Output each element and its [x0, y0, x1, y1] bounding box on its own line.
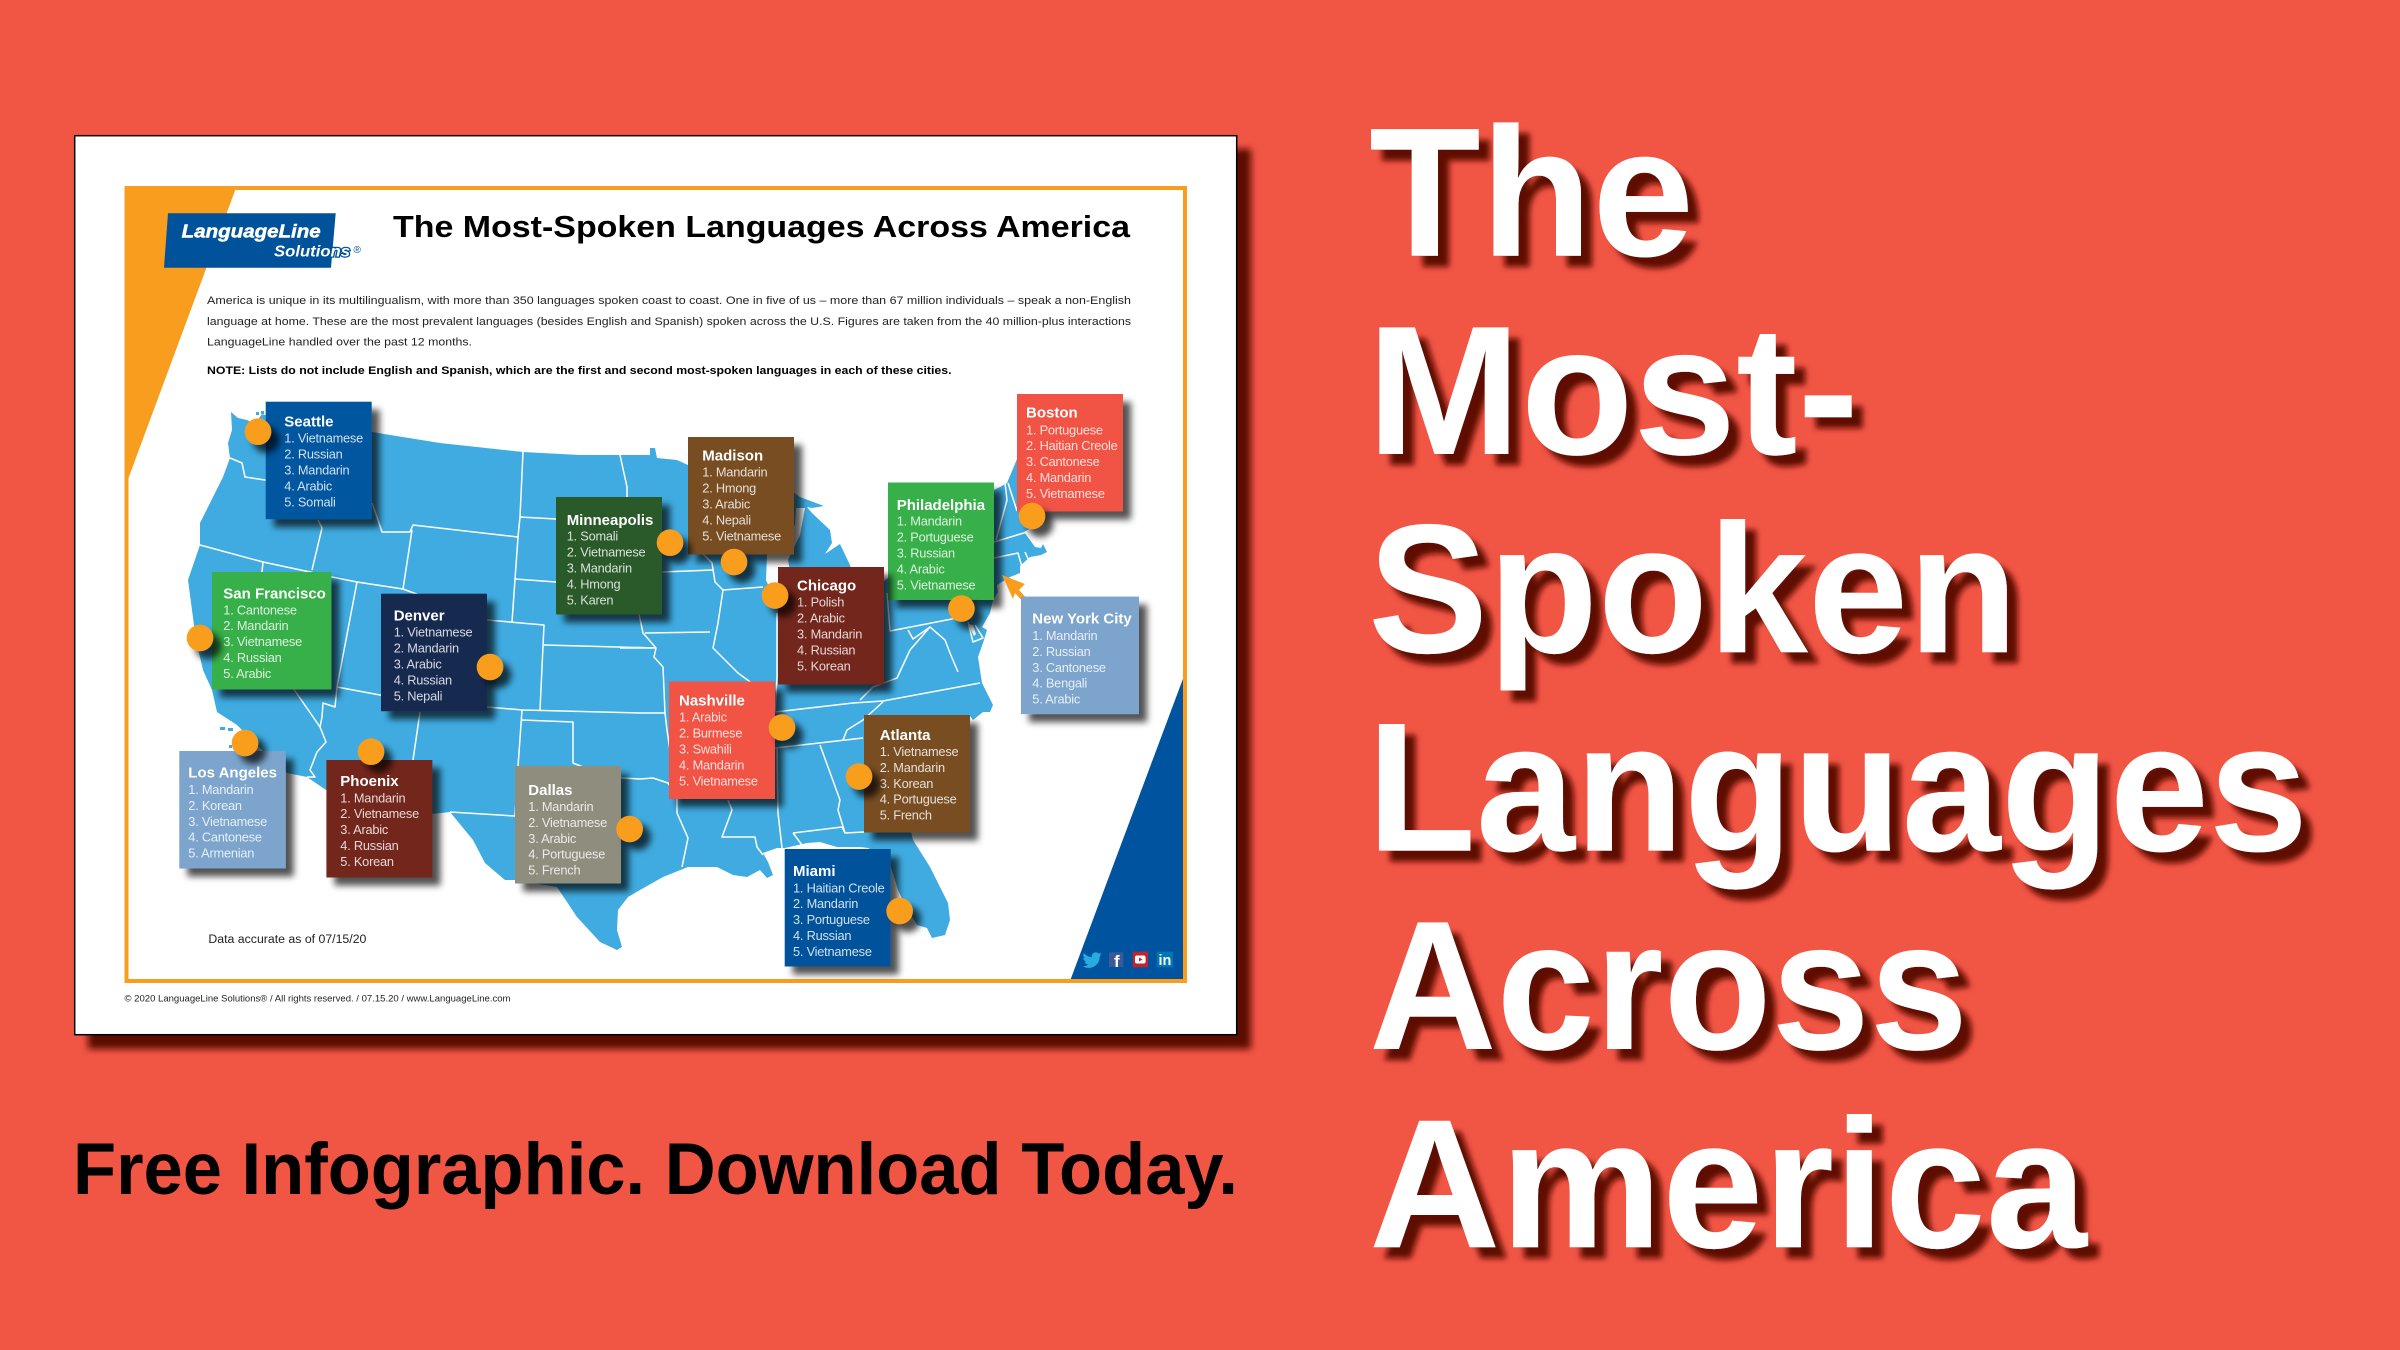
callout: San Francisco: 1. Cantonese [223, 602, 297, 617]
intro paragraph [207, 295, 1132, 348]
callout: Dallas: Dallas [528, 782, 573, 799]
map islands and water details [220, 411, 264, 748]
callout: Dallas [515, 766, 621, 884]
icon: youtube [1133, 952, 1148, 967]
callout: San Francisco: 3. Vietnamese [223, 634, 302, 649]
callout: Boston: 1. Portuguese [1026, 422, 1103, 437]
callout: Philadelphia: Philadelphia [897, 497, 986, 514]
main heading: The [1369, 89, 1694, 295]
icon: facebook: f [1114, 952, 1120, 971]
callout: Seattle: 2. Russian [284, 447, 343, 462]
main heading: Spoken [1368, 485, 2018, 691]
main heading [1367, 89, 2308, 1286]
orange corner triangle [127, 188, 236, 482]
callout: Los Angeles: 5. Armenian [188, 846, 254, 861]
callout: Philadelphia: 4. Arabic [897, 561, 945, 576]
callout: Seattle: 4. Arabic [284, 478, 333, 493]
callout: Dallas: 4. Portuguese [528, 847, 605, 862]
callout: San Francisco: 4. Russian [223, 650, 282, 665]
callout: Miami: 2. Mandarin [793, 896, 858, 911]
callout: Miami: 5. Vietnamese [793, 944, 872, 959]
logo: LanguageLine Solutions: LanguageLine [182, 221, 321, 241]
copyright footer: © 2020 LanguageLine Solutions® / All rights reserved. / 07.15.20 / www.LanguageLine.com [124, 994, 510, 1004]
callout: Dallas: 5. French [528, 863, 580, 878]
callout: Phoenix [326, 760, 432, 878]
callout: Denver: 2. Mandarin [394, 641, 459, 656]
callout: Phoenix: 5. Korean [340, 854, 394, 869]
callout: Boston: 2. Haitian Creole [1026, 438, 1118, 453]
card shadow [88, 149, 1251, 1049]
callout: New York City: 3. Cantonese [1032, 660, 1106, 675]
callout: Madison: 4. Nepali [702, 512, 751, 527]
callout: Philadelphia: 1. Mandarin [897, 514, 962, 529]
city location markers [187, 418, 1045, 924]
callout: Madison: 1. Mandarin [702, 465, 768, 480]
callout: Miami [785, 849, 891, 966]
callout: Atlanta: 2. Mandarin [880, 760, 945, 775]
callout: Boston: 4. Mandarin [1026, 470, 1091, 485]
callout: Minneapolis: 1. Somali [567, 529, 618, 544]
main heading: Most- [1367, 287, 1859, 493]
callout: Denver: 4. Russian [394, 672, 452, 687]
callout: New York City: 1. Mandarin [1032, 628, 1098, 643]
icon: linkedin: in [1158, 953, 1171, 969]
tagline: Free Infographic. Download Today. [73, 1129, 1238, 1210]
callout: San Francisco: 5. Arabic [223, 666, 272, 681]
callout: Atlanta: 5. French [880, 808, 932, 823]
callout: Seattle: 3. Mandarin [284, 462, 350, 478]
callout: Philadelphia [888, 482, 994, 600]
callout: New York City: 2. Russian [1032, 644, 1091, 659]
callout: Chicago: Chicago [797, 578, 856, 595]
callout: Nashville: 1. Arabic [679, 710, 728, 725]
card title: The Most-Spoken Languages Across America [393, 209, 1131, 244]
card sheet [75, 136, 1237, 1035]
callout: Madison: 2. Hmong [702, 481, 756, 496]
callout: Boston: 3. Cantonese [1026, 454, 1100, 469]
callout: Seattle: 5. Somali [284, 494, 336, 509]
callout: Los Angeles: 2. Korean [188, 798, 242, 813]
callout: Chicago [778, 567, 884, 684]
callout: Miami: 3. Portuguese [793, 912, 870, 927]
callout: Dallas: 1. Mandarin [528, 799, 594, 814]
callout: Dallas: 2. Vietnamese [528, 815, 607, 830]
callout: Atlanta: Atlanta [880, 727, 931, 744]
callout: Seattle: Seattle [284, 414, 334, 431]
callout: Madison: 3. Arabic [702, 496, 751, 512]
callout: New York City: 5. Arabic [1032, 692, 1081, 707]
callout: Atlanta [864, 715, 970, 832]
callout: Boston [1017, 394, 1123, 512]
callout: New York City: New York City [1032, 610, 1132, 627]
arrow: New York City pointer [1002, 575, 1032, 607]
note: NOTE: Lists do not include English and Spanish, which are the first and second most-spoken languages in each of these cities. [207, 365, 951, 377]
orange frame [126, 188, 1185, 981]
callout: Denver: 5. Nepali [394, 688, 442, 703]
callout: Boston: Boston [1026, 405, 1078, 422]
map: contiguous United States [188, 411, 1075, 950]
callout: Minneapolis: Minneapolis [567, 512, 653, 529]
callout: Miami: 1. Haitian Creole [793, 880, 885, 895]
callout: Madison: 5. Vietnamese [702, 528, 781, 543]
callout: Atlanta: 3. Korean [880, 776, 933, 791]
callout: Los Angeles: Los Angeles [188, 765, 277, 782]
callout: Denver: 3. Arabic [394, 656, 442, 672]
logo: LanguageLine Solutions: ® [354, 245, 362, 256]
logo: LanguageLine Solutions: Solutions [274, 244, 350, 261]
callout: Philadelphia: 5. Vietnamese [897, 577, 976, 592]
icon: twitter [1082, 952, 1102, 968]
social icons [1082, 952, 1173, 971]
callout: Minneapolis: 4. Hmong [567, 576, 621, 591]
callout: Atlanta: 1. Vietnamese [880, 744, 959, 759]
callout: Phoenix: 4. Russian [340, 838, 399, 853]
intro paragraph: language at home. These are the most prevalent languages (besides English and Spanish) spoken across the U.S. Figures are taken from the 40 million-plus interactions [207, 316, 1132, 328]
data accuracy note: Data accurate as of 07/15/20 [208, 934, 366, 946]
callout: Denver: 1. Vietnamese [394, 625, 473, 640]
callout: Chicago: 5. Korean [797, 658, 851, 673]
panel: infographic preview card [75, 136, 1251, 1049]
callout: Philadelphia: 3. Russian [897, 546, 955, 560]
blue corner triangle [1070, 676, 1184, 981]
callout: San Francisco: 2. Mandarin [223, 618, 289, 633]
callout: Chicago: 1. Polish [797, 595, 844, 610]
callout: Denver [381, 594, 487, 711]
callout: Chicago: 4. Russian [797, 642, 855, 657]
callout: Miami: 4. Russian [793, 928, 851, 943]
main heading: Across [1369, 882, 1968, 1088]
callout: Nashville [669, 682, 775, 799]
callout: Nashville: 4. Mandarin [679, 757, 744, 772]
callout: San Francisco: San Francisco [223, 585, 326, 602]
callout: Denver: Denver [394, 608, 445, 625]
callout: New York City: 4. Bengali [1032, 676, 1087, 691]
callout: Los Angeles: 1. Mandarin [188, 782, 254, 797]
callout: Phoenix: Phoenix [340, 773, 399, 790]
callout: Seattle [266, 402, 372, 519]
callout: Boston: 5. Vietnamese [1026, 486, 1105, 501]
callout: Dallas: 3. Arabic [528, 831, 577, 846]
logo: LanguageLine Solutions [164, 213, 362, 268]
callout: Nashville: 3. Swahili [679, 742, 732, 756]
main heading: Languages [1367, 684, 2308, 890]
callout: Los Angeles: 4. Cantonese [188, 830, 262, 845]
callout: Nashville: 2. Burmese [679, 726, 742, 741]
callout: Nashville: Nashville [679, 693, 745, 710]
callout: Nashville: 5. Vietnamese [679, 773, 758, 788]
callout: Minneapolis: 2. Vietnamese [567, 545, 646, 560]
callout: Phoenix: 1. Mandarin [340, 790, 406, 805]
callout: Los Angeles [179, 751, 286, 868]
callout: Madison [688, 437, 794, 554]
main heading: America [1369, 1080, 2089, 1286]
callout: Minneapolis: 3. Mandarin [567, 560, 632, 576]
callout: Los Angeles: 3. Vietnamese [188, 814, 267, 829]
callout: Miami: Miami [793, 863, 836, 880]
callout: Seattle: 1. Vietnamese [284, 431, 363, 446]
map: state boundary lines [200, 452, 1029, 867]
intro paragraph: America is unique in its multilingualism, with more than 350 languages spoken coast to coast. One in five of us – more than 67 million individuals – speak a non-English [207, 295, 1131, 307]
callout: Minneapolis: 5. Karen [567, 592, 613, 607]
callout: Philadelphia: 2. Portuguese [897, 530, 974, 545]
callout: Phoenix: 3. Arabic [340, 822, 389, 837]
callout: Phoenix: 2. Vietnamese [340, 806, 419, 821]
callout: Chicago: 2. Arabic [797, 611, 846, 626]
callout: Chicago: 3. Mandarin [797, 626, 862, 642]
callout: New York City [1021, 597, 1139, 714]
callout: Atlanta: 4. Portuguese [880, 792, 957, 807]
intro paragraph: LanguageLine handled over the past 12 months. [207, 336, 472, 348]
callout: Madison: Madison [702, 448, 763, 465]
callout: San Francisco [212, 572, 331, 690]
callout: Minneapolis [556, 497, 662, 614]
